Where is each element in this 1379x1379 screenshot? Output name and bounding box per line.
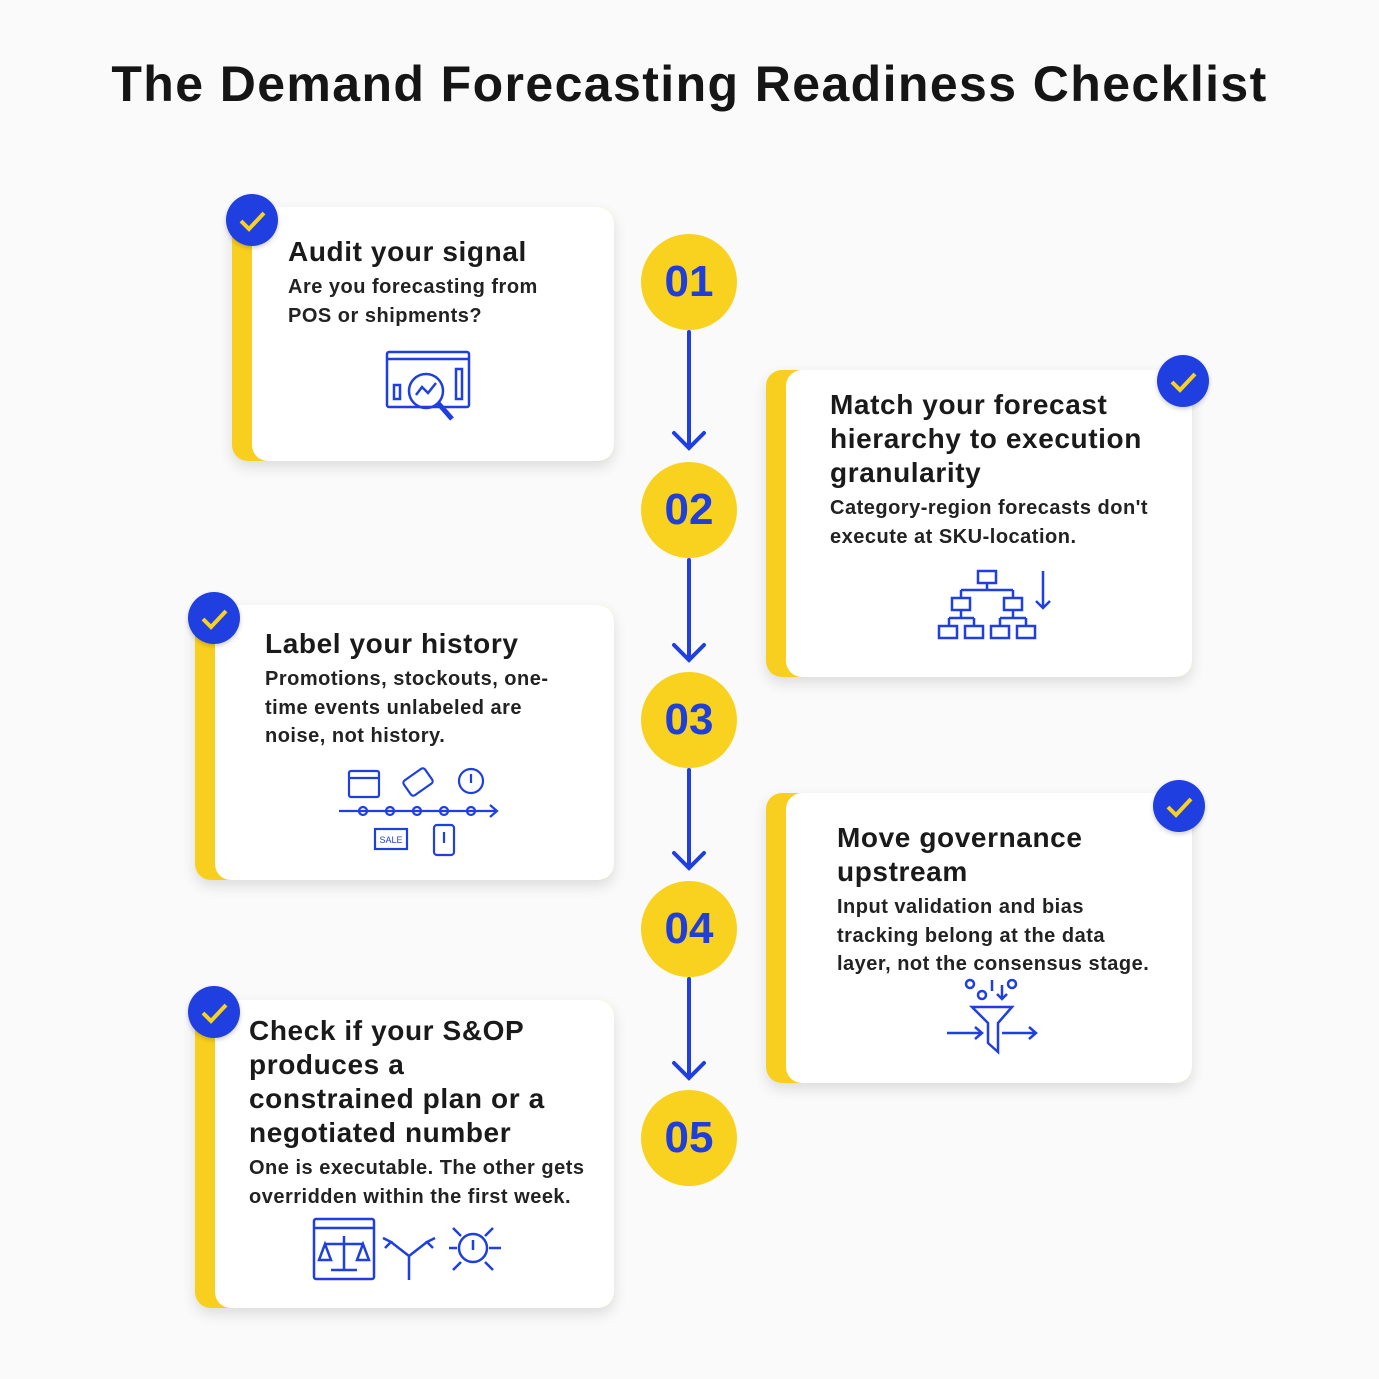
- text: governance: [837, 822, 1149, 975]
- check 5: [188, 986, 240, 1038]
- text: audit: Are you forecasting from: [288, 276, 538, 298]
- panel: audit your signal: [232, 207, 614, 461]
- icon: hierarchy tree: [938, 570, 1051, 640]
- step number 01: [641, 234, 737, 330]
- step number 01: 01: [665, 257, 713, 306]
- text: governance: Input validation and bias: [837, 896, 1084, 918]
- step number 05: [641, 1090, 737, 1186]
- text: match: [830, 389, 1148, 548]
- text: S&OP: One is executable. The other gets: [249, 1157, 584, 1179]
- step number 05: 05: [665, 1113, 713, 1162]
- text: governance: Move governance: [837, 822, 1083, 853]
- text: S&OP: Check if your S&OP: [249, 1015, 524, 1046]
- step number 04: [641, 881, 737, 977]
- text: governance: upstream: [837, 856, 968, 887]
- check 2: [1157, 355, 1209, 407]
- text: governance: tracking belong at the data: [837, 924, 1105, 946]
- check 3: [188, 592, 240, 644]
- text: audit: [288, 236, 538, 326]
- title: The Demand Forecasting Readiness Checklist: [111, 56, 1268, 112]
- panel: match hierarchy: [766, 370, 1192, 677]
- check 1: [226, 194, 278, 246]
- text: audit: POS or shipments?: [288, 304, 482, 326]
- text: match: granularity: [830, 457, 981, 488]
- check 4: [1153, 780, 1205, 832]
- text: match: hierarchy to execution: [830, 423, 1142, 454]
- text: S&OP: constrained plan or a: [249, 1083, 545, 1114]
- text: S&OP: overridden within the first week.: [249, 1186, 571, 1208]
- text: label: [265, 628, 549, 747]
- step number 02: 02: [665, 485, 713, 534]
- text: label: noise, not history.: [265, 725, 445, 747]
- text: match: Category-region forecasts don't: [830, 497, 1148, 519]
- text: S&OP: negotiated number: [249, 1117, 511, 1148]
- panel: governance upstream: [766, 793, 1192, 1083]
- text: match: Match your forecast: [830, 389, 1107, 420]
- step number 03: 03: [665, 695, 713, 744]
- text: label: Promotions, stockouts, one-: [265, 668, 549, 690]
- panel: S&OP plan: [195, 1000, 614, 1308]
- text: label: time events unlabeled are: [265, 696, 522, 718]
- panel: label history: [195, 605, 614, 880]
- text: audit: Audit your signal: [288, 236, 527, 267]
- text: S&OP: produces a: [249, 1049, 404, 1080]
- icon: funnel: [947, 978, 1038, 1055]
- step number 03: [641, 672, 737, 768]
- icon: scales, fork, alert: [312, 1218, 501, 1280]
- text: S&OP: [249, 1015, 584, 1208]
- step number 02: [641, 462, 737, 558]
- icon: event timeline: [339, 767, 499, 856]
- text: match: execute at SKU-location.: [830, 526, 1077, 548]
- icon: event timeline: SALE: [379, 835, 403, 845]
- text: label: Label your history: [265, 628, 519, 659]
- step number 04: 04: [665, 904, 713, 953]
- text: governance: layer, not the consensus stage.: [837, 953, 1149, 975]
- icon: chart with magnifier: [386, 350, 470, 421]
